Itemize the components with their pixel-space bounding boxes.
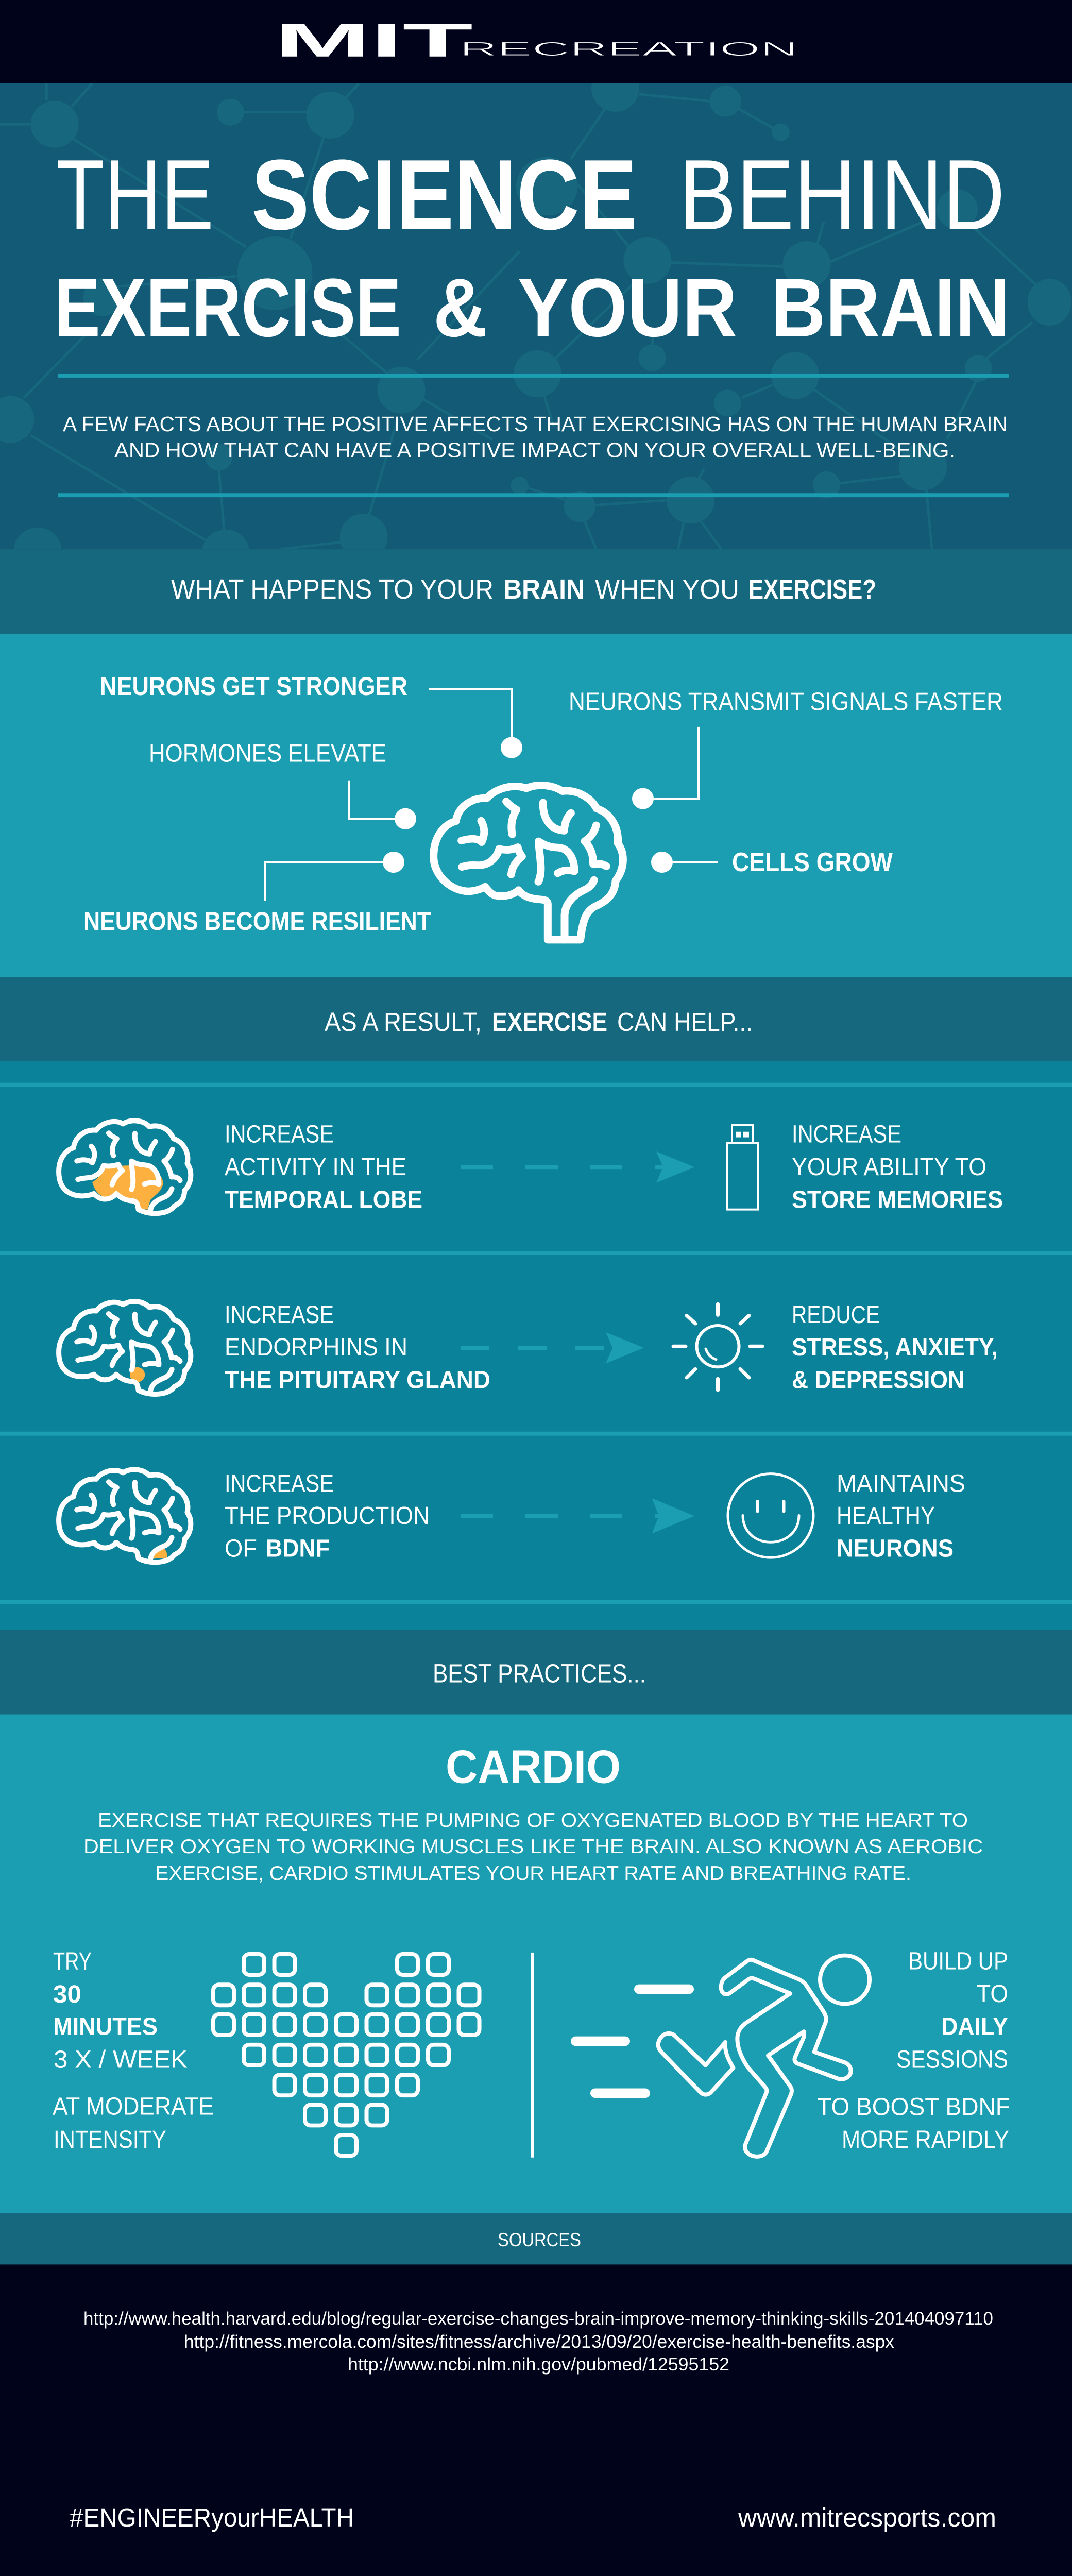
title: EXERCISE bbox=[55, 262, 401, 354]
row 1: temporal lobe bbox=[59, 1121, 1003, 1214]
callout: cells grow bbox=[651, 848, 893, 877]
text: temporal lobe: ACTIVITY IN THE bbox=[225, 1153, 406, 1181]
intro text: AND HOW THAT CAN HAVE A POSITIVE IMPACT ON YOUR OVERALL WELL-BEING. bbox=[114, 438, 955, 462]
intro text bbox=[63, 412, 1008, 462]
heading: cardio: CARDIO bbox=[446, 1741, 621, 1793]
icon: runner bbox=[658, 1956, 870, 2157]
arrow bbox=[461, 1498, 694, 1534]
text: healthy neurons: HEALTHY bbox=[837, 1502, 935, 1530]
text: reduce stress: STRESS, ANXIETY, bbox=[792, 1333, 998, 1361]
source links: http://www.ncbi.nlm.nih.gov/pubmed/12595152 bbox=[348, 2354, 729, 2375]
text: try 30 minutes: TRY bbox=[53, 1948, 92, 1975]
cardio description: DELIVER OXYGEN TO WORKING MUSCLES LIKE THE BRAIN. ALSO KNOWN AS AEROBIC bbox=[83, 1835, 983, 1858]
section band: as a result bbox=[0, 977, 1072, 1061]
text: try 30 minutes: AT MODERATE bbox=[53, 2093, 214, 2120]
text: build up to daily sessions: TO BOOST BDNF bbox=[817, 2093, 1010, 2121]
section band: what happens: BRAIN bbox=[503, 574, 585, 605]
callout: neurons get stronger: NEURONS GET STRONGER bbox=[100, 672, 407, 701]
callout: neurons transmit signals faster bbox=[569, 688, 1003, 809]
text: build up to daily sessions: DAILY bbox=[941, 2013, 1008, 2041]
text: temporal lobe bbox=[225, 1121, 422, 1214]
text: build up to daily sessions: BUILD UP bbox=[908, 1947, 1008, 1975]
section band: best practices bbox=[0, 1630, 1072, 1714]
text: reduce stress bbox=[792, 1301, 998, 1394]
title bbox=[55, 139, 1010, 354]
text: bdnf: BDNF bbox=[266, 1535, 330, 1563]
callout: neurons become resilient bbox=[83, 852, 431, 936]
footer bbox=[0, 2264, 1072, 2576]
text: store memories: INCREASE bbox=[792, 1121, 901, 1148]
text: store memories: STORE MEMORIES bbox=[792, 1186, 1003, 1214]
neuron network background bbox=[0, 65, 1071, 577]
title: YOUR bbox=[518, 262, 737, 354]
hashtag: #ENGINEERyourHEALTH bbox=[70, 2502, 354, 2532]
text: store memories bbox=[792, 1121, 1003, 1214]
callout: neurons become resilient: NEURONS BECOME RESILIENT bbox=[83, 906, 431, 936]
section band: as a result: EXERCISE bbox=[492, 1007, 607, 1037]
section band: as a result: AS A RESULT, bbox=[325, 1007, 482, 1037]
row 2: pituitary gland bbox=[59, 1301, 998, 1394]
text: build up to daily sessions bbox=[817, 1947, 1010, 2154]
icon: usb drive bbox=[727, 1125, 758, 1210]
text: build up to daily sessions: MORE RAPIDLY bbox=[842, 2126, 1009, 2154]
callout: hormones elevate bbox=[149, 739, 416, 829]
callout: neurons transmit signals faster: NEURONS TRANSMIT SIGNALS FASTER bbox=[569, 688, 1003, 716]
header bar bbox=[0, 0, 1072, 83]
text: pituitary gland: ENDORPHINS IN bbox=[225, 1333, 407, 1361]
icon: brain with bdnf region highlighted bbox=[59, 1469, 191, 1562]
section band: what happens: EXERCISE? bbox=[748, 574, 876, 605]
icon: heart of rounded cells bbox=[213, 1954, 479, 2156]
text: pituitary gland: THE PITUITARY GLAND bbox=[225, 1366, 490, 1394]
text: bdnf: INCREASE bbox=[225, 1470, 334, 1497]
section band: best practices: BEST PRACTICES... bbox=[433, 1658, 646, 1688]
text: store memories: YOUR ABILITY TO bbox=[792, 1153, 986, 1181]
text: build up to daily sessions: SESSIONS bbox=[896, 2046, 1008, 2073]
logo: MIT Recreation bbox=[275, 14, 798, 67]
section band: as a result: CAN HELP... bbox=[617, 1007, 753, 1037]
source links: http://fitness.mercola.com/sites/fitness/archive/2013/09/20/exercise-health-benefits.aspx bbox=[184, 2331, 894, 2352]
text: bdnf: OF bbox=[225, 1535, 257, 1563]
cardio description: EXERCISE THAT REQUIRES THE PUMPING OF OXYGENATED BLOOD BY THE HEART TO bbox=[98, 1809, 968, 1832]
icon: brain with temporal lobe highlighted bbox=[59, 1121, 191, 1213]
section band: what happens bbox=[0, 549, 1072, 634]
text: healthy neurons bbox=[837, 1470, 965, 1563]
arrow bbox=[461, 1151, 694, 1183]
title: BEHIND bbox=[679, 139, 1005, 250]
section band: sources bbox=[0, 2213, 1072, 2264]
text: try 30 minutes: INTENSITY bbox=[54, 2126, 166, 2154]
title: SCIENCE bbox=[251, 139, 637, 250]
text: try 30 minutes: MINUTES bbox=[53, 2013, 158, 2041]
panel: benefits rows bbox=[0, 1061, 1072, 1630]
text: try 30 minutes: 3 X / WEEK bbox=[54, 2046, 188, 2073]
section band: what happens: WHEN YOU bbox=[595, 574, 739, 605]
source links bbox=[83, 2308, 993, 2375]
text: pituitary gland: INCREASE bbox=[225, 1301, 334, 1329]
arrow bbox=[461, 1332, 644, 1363]
callout: neurons get stronger bbox=[100, 672, 522, 758]
text: build up to daily sessions: TO bbox=[977, 1980, 1008, 2008]
title: THE bbox=[56, 139, 214, 250]
title: & bbox=[433, 262, 487, 354]
logo: MIT Recreation: RECREATION bbox=[460, 38, 798, 60]
text: reduce stress: & DEPRESSION bbox=[792, 1366, 964, 1394]
panel: brain effects bbox=[0, 634, 1072, 977]
icon: speed lines bbox=[571, 1985, 694, 2098]
text: healthy neurons: MAINTAINS bbox=[837, 1470, 965, 1497]
website: www.mitrecsports.com bbox=[738, 2502, 996, 2532]
cardio description bbox=[83, 1809, 983, 1885]
title: BRAIN bbox=[771, 262, 1010, 354]
panel: cardio bbox=[0, 1714, 1072, 2213]
text: reduce stress: REDUCE bbox=[792, 1301, 880, 1329]
text: try 30 minutes: 30 bbox=[53, 1980, 81, 2008]
callout: hormones elevate: HORMONES ELEVATE bbox=[149, 739, 386, 767]
icon: brain bbox=[434, 785, 623, 940]
text: try 30 minutes bbox=[53, 1948, 214, 2154]
text: healthy neurons: NEURONS bbox=[837, 1535, 954, 1563]
icon: brain with pituitary gland highlighted bbox=[59, 1301, 191, 1394]
callout: cells grow: CELLS GROW bbox=[732, 848, 893, 877]
icon: smiley bbox=[728, 1474, 813, 1557]
text: bdnf: THE PRODUCTION bbox=[225, 1502, 430, 1530]
intro text: A FEW FACTS ABOUT THE POSITIVE AFFECTS THAT EXERCISING HAS ON THE HUMAN BRAIN bbox=[63, 412, 1008, 436]
panel: hero bbox=[0, 65, 1072, 577]
row 3: bdnf bbox=[59, 1469, 965, 1563]
text: temporal lobe: INCREASE bbox=[225, 1121, 334, 1148]
icon: sun bbox=[673, 1304, 762, 1390]
text: bdnf bbox=[225, 1470, 430, 1563]
section band: what happens: WHAT HAPPENS TO YOUR bbox=[171, 574, 494, 605]
section band: sources: SOURCES bbox=[498, 2229, 581, 2250]
cardio description: EXERCISE, CARDIO STIMULATES YOUR HEART RATE AND BREATHING RATE. bbox=[155, 1862, 911, 1885]
text: pituitary gland bbox=[225, 1301, 490, 1394]
text: temporal lobe: TEMPORAL LOBE bbox=[225, 1186, 422, 1214]
logo: MIT Recreation: MIT bbox=[275, 14, 473, 67]
source links: http://www.health.harvard.edu/blog/regular-exercise-changes-brain-improve-memory-thinking-skills-201404097110 bbox=[83, 2308, 993, 2329]
